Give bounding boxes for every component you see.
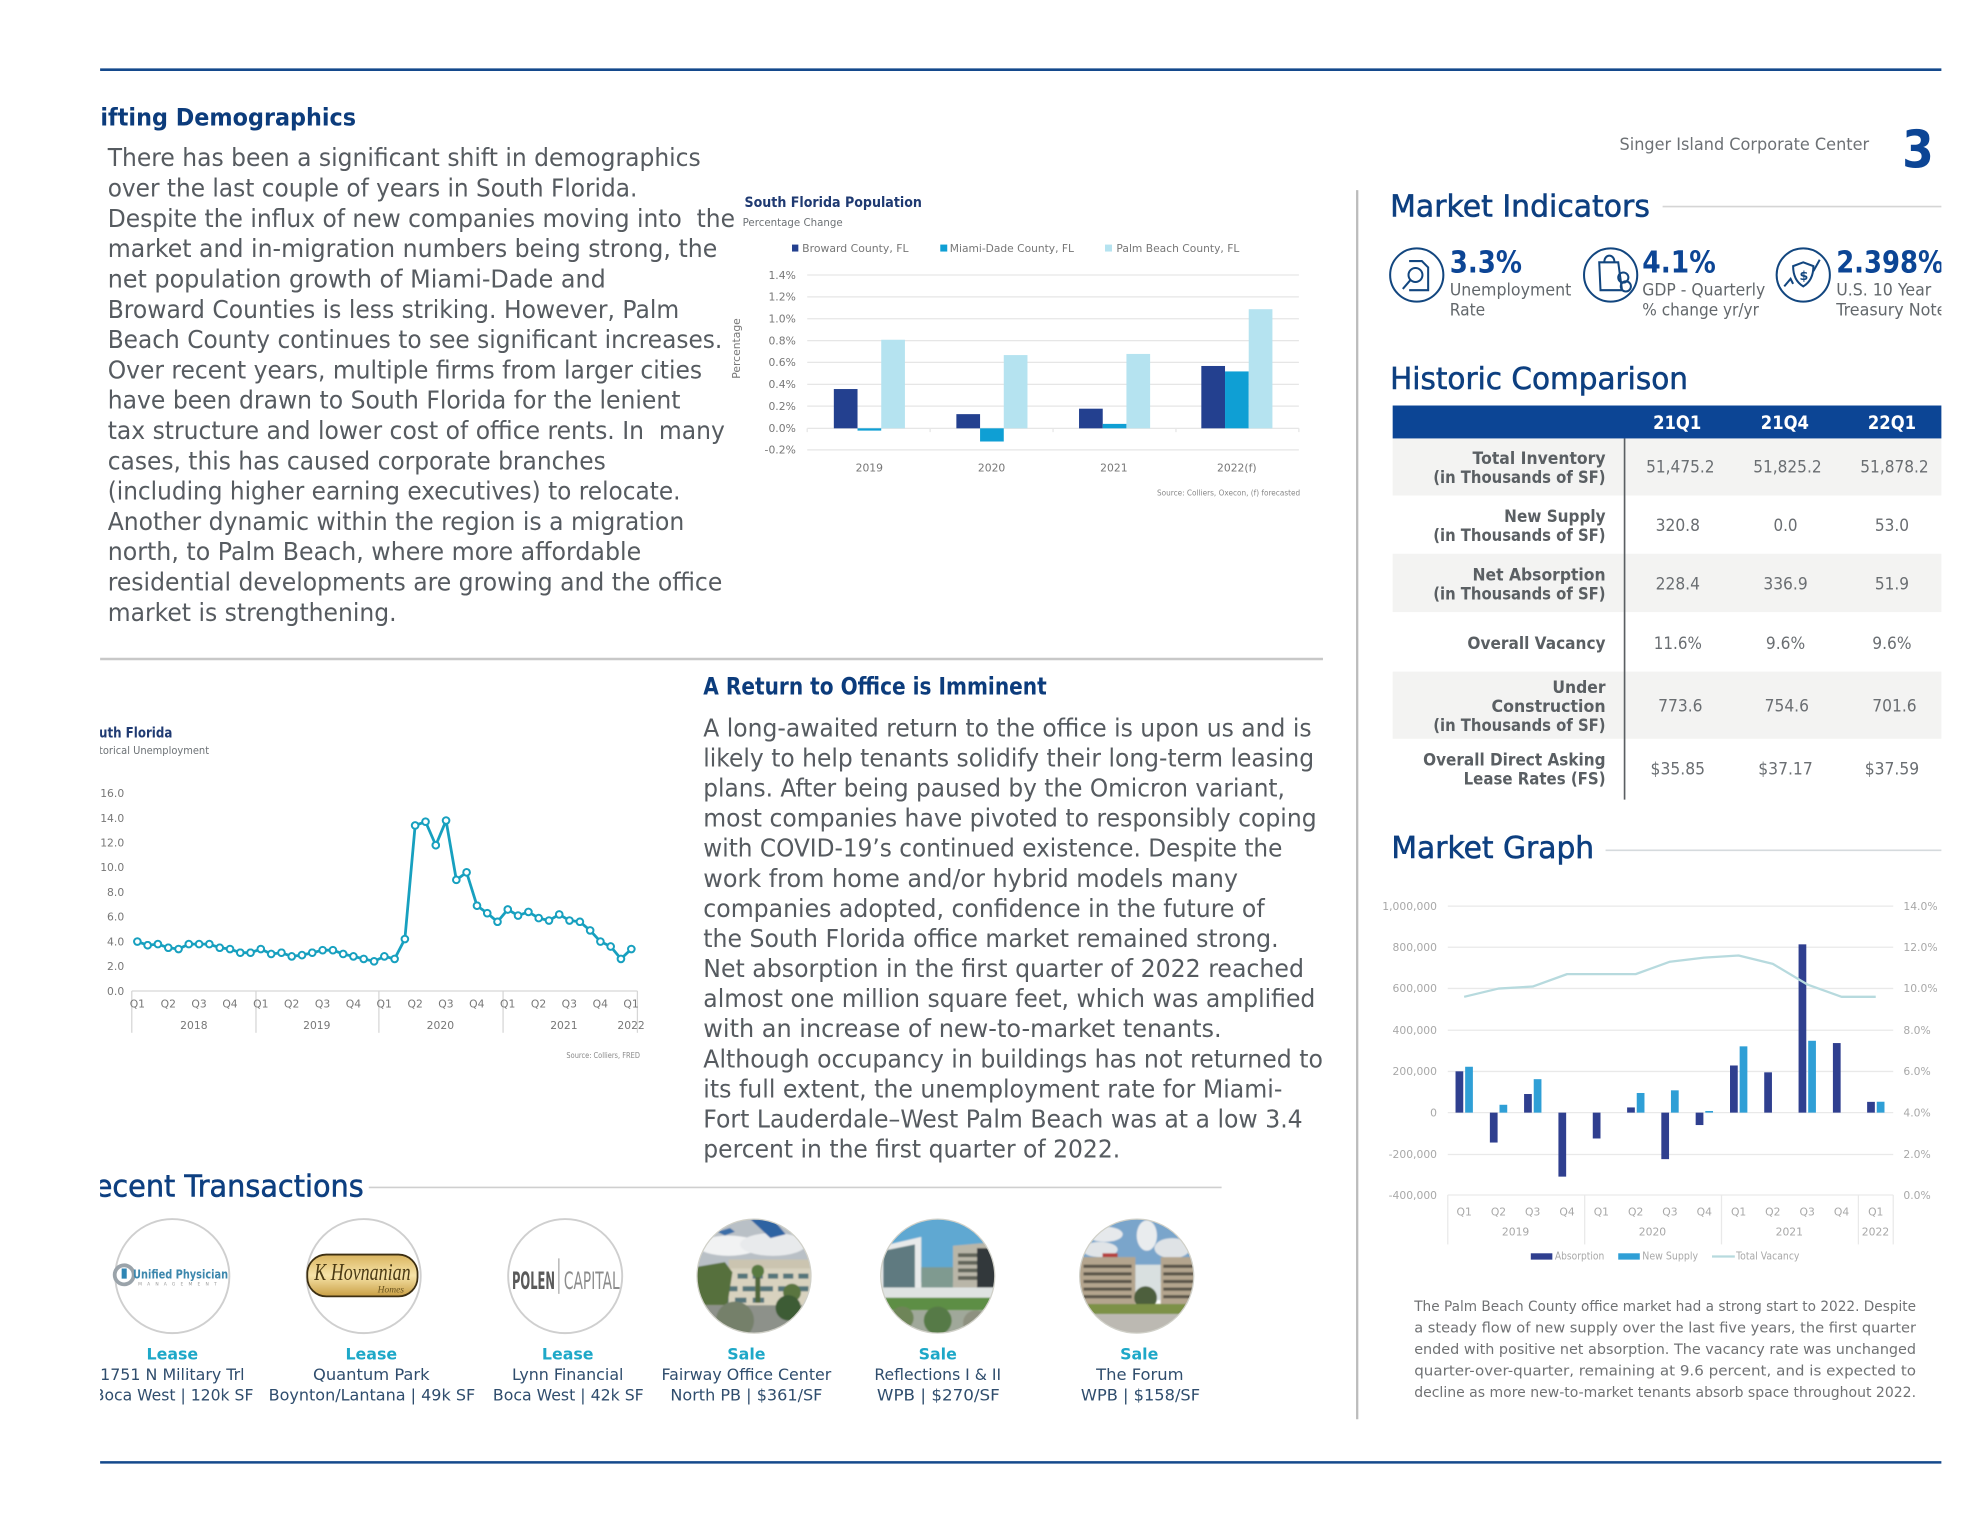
line chart: South Florida Historical Unemployment: 2022 bbox=[617, 1019, 645, 1032]
bar chart: South Florida Population: 0.8% bbox=[768, 334, 796, 347]
line chart: South Florida Historical Unemployment: 2019 bbox=[303, 1019, 331, 1032]
text block: demographics: residential developments are growing and the office bbox=[108, 568, 722, 597]
text block: return to office: Fort Lauderdale–West Palm Beach was at a low 3.4 bbox=[703, 1105, 1303, 1134]
table: historic comparison: $37.59 bbox=[1865, 759, 1919, 779]
table: historic comparison: 51,475.2 bbox=[1646, 458, 1715, 478]
text block: market graph commentary: quarter-over-quarter, remaining at 9.6 percent, and is expected to bbox=[1414, 1363, 1916, 1380]
bar chart: South Florida Population: 0.0% bbox=[768, 422, 796, 435]
text block: demographics: over the last couple of years in South Florida. bbox=[108, 173, 637, 202]
text block: demographics: tax structure and lower cost of office rents. In many bbox=[108, 416, 725, 445]
table: historic comparison: 9.6% bbox=[1872, 634, 1912, 654]
combo chart: absorption, new supply and vacancy: Absorption bbox=[1555, 1250, 1604, 1263]
line chart: South Florida Historical Unemployment: Source: Colliers, FRED bbox=[566, 1051, 640, 1060]
text block: demographics: Beach County continues to see significant increases. bbox=[108, 325, 722, 354]
text block: demographics: net population growth of Miami-Dade and bbox=[108, 265, 606, 294]
bar chart: South Florida Population: Source: Colliers, Oxecon, (f) forecasted bbox=[1157, 488, 1300, 497]
line chart: South Florida Historical Unemployment: Historical Unemployment bbox=[84, 744, 209, 757]
text block: return to office: most companies have pivoted to responsibly coping bbox=[703, 804, 1317, 833]
line chart: South Florida Historical Unemployment: Q3 bbox=[315, 997, 330, 1010]
transaction: Unified Physician lease: Unified Physician bbox=[133, 1268, 228, 1282]
transaction: Polen Capital lease: Lease bbox=[542, 1345, 594, 1364]
combo chart: absorption, new supply and vacancy: 6.0% bbox=[1903, 1065, 1931, 1078]
line chart: South Florida Historical Unemployment: 0.0 bbox=[107, 985, 124, 998]
text block: return to office: A long-awaited return to the office is upon us and is bbox=[703, 713, 1312, 742]
indicator: GDP: 4.1% bbox=[1642, 245, 1716, 280]
transaction: The Forum sale: The Forum bbox=[1095, 1365, 1184, 1384]
text block: return to office: percent in the first quarter of 2022. bbox=[703, 1135, 1120, 1164]
combo chart: absorption, new supply and vacancy: 4.0% bbox=[1903, 1106, 1931, 1119]
indicator: unemployment rate: Rate bbox=[1450, 301, 1485, 321]
text block: demographics: Another dynamic within the region is a migration bbox=[108, 507, 684, 536]
combo chart: absorption, new supply and vacancy: 2019 bbox=[1502, 1226, 1529, 1239]
transaction: K Hovnanian lease: Quantum Park bbox=[313, 1365, 430, 1384]
text block: demographics: (including higher earning executives) to relocate. bbox=[108, 477, 680, 506]
table: historic comparison: 228.4 bbox=[1656, 574, 1700, 594]
transaction: Reflections I and II sale bbox=[874, 1217, 1001, 1404]
combo chart: absorption, new supply and vacancy: Q1 bbox=[1868, 1205, 1883, 1218]
indicator: treasury note bbox=[1777, 245, 1946, 321]
transaction: Reflections I and II sale: Sale bbox=[919, 1345, 957, 1364]
table: historic comparison: $35.85 bbox=[1651, 759, 1705, 779]
transaction: Polen Capital lease: POLEN bbox=[512, 1267, 555, 1295]
combo chart: absorption, new supply and vacancy: Q3 bbox=[1800, 1205, 1815, 1218]
transaction: The Forum sale: Sale bbox=[1120, 1345, 1158, 1364]
table: historic comparison: New Supply bbox=[1504, 507, 1606, 527]
text block: demographics: market and in-migration numbers being strong, the bbox=[108, 234, 717, 263]
indicator: treasury note: U.S. 10 Year bbox=[1836, 280, 1932, 300]
table: historic comparison: 0.0 bbox=[1773, 516, 1798, 536]
heading: Historic Comparison: Historic Comparison bbox=[1390, 362, 1688, 397]
line chart: South Florida Historical Unemployment: Q2 bbox=[284, 997, 299, 1010]
combo chart: absorption, new supply and vacancy: Q1 bbox=[1456, 1205, 1472, 1218]
combo chart: absorption, new supply and vacancy: 10.0% bbox=[1903, 982, 1938, 995]
text block: demographics: cases, this has caused corporate branches bbox=[108, 446, 606, 475]
combo chart: absorption, new supply and vacancy: -400,000 bbox=[1389, 1189, 1437, 1202]
bar chart: South Florida Population: 2020 bbox=[978, 461, 1005, 474]
combo chart: absorption, new supply and vacancy: 12.0% bbox=[1903, 941, 1938, 954]
line chart: South Florida Historical Unemployment: Q3 bbox=[438, 997, 454, 1010]
transaction: Unified Physician lease bbox=[94, 1219, 253, 1404]
text block: return to office: work from home and/or hybrid models many bbox=[703, 864, 1238, 893]
combo chart: absorption, new supply and vacancy: Q2 bbox=[1628, 1205, 1643, 1218]
transaction: Polen Capital lease: CAPITAL bbox=[564, 1267, 620, 1295]
heading: Market Indicators: Market Indicators bbox=[1390, 190, 1650, 225]
line chart: South Florida Historical Unemployment: 10.0 bbox=[100, 861, 124, 874]
transaction: K Hovnanian lease: Homes bbox=[377, 1286, 404, 1296]
text block: return to office: companies adopted, confidence in the future of bbox=[703, 894, 1266, 923]
icon: magnifier on document bbox=[1390, 248, 1443, 302]
table: historic comparison: 21Q4 bbox=[1761, 412, 1809, 434]
combo chart: absorption, new supply and vacancy: 0.0% bbox=[1903, 1189, 1931, 1202]
combo chart: absorption, new supply and vacancy bbox=[1382, 900, 1938, 1263]
combo chart: absorption, new supply and vacancy: 2.0% bbox=[1903, 1148, 1931, 1161]
transaction: Fairway Office Center sale: North PB | $361/SF bbox=[670, 1385, 822, 1404]
combo chart: absorption, new supply and vacancy: 0 bbox=[1430, 1106, 1437, 1119]
transaction: Unified Physician lease: MANAGEMENT bbox=[138, 1282, 217, 1288]
transaction: K Hovnanian lease: K Hovnanian bbox=[314, 1260, 411, 1286]
table: historic comparison: Overall Vacancy bbox=[1467, 634, 1606, 654]
combo chart: absorption, new supply and vacancy: 8.0% bbox=[1903, 1024, 1931, 1037]
text block: demographics: Over recent years, multiple firms from larger cities bbox=[108, 355, 702, 384]
bar chart: South Florida Population: Percentage bbox=[730, 318, 743, 379]
table: historic comparison: Net Absorption bbox=[1473, 565, 1606, 585]
line chart: South Florida Historical Unemployment: 2020 bbox=[427, 1019, 454, 1032]
table: historic comparison: $37.17 bbox=[1758, 759, 1813, 779]
transaction: K Hovnanian lease: Boynton/Lantana | 49k SF bbox=[269, 1385, 475, 1404]
combo chart: absorption, new supply and vacancy: Q1 bbox=[1594, 1205, 1609, 1218]
combo chart: absorption, new supply and vacancy: 400,000 bbox=[1392, 1024, 1437, 1037]
line chart: South Florida Historical Unemployment: 14.0 bbox=[100, 812, 124, 825]
table: historic comparison: Construction bbox=[1492, 697, 1606, 717]
line chart: South Florida Historical Unemployment: Q2 bbox=[407, 997, 423, 1010]
indicator: treasury note: $ bbox=[1799, 268, 1808, 283]
table: historic comparison: 773.6 bbox=[1658, 697, 1703, 717]
combo chart: absorption, new supply and vacancy: Q4 bbox=[1697, 1205, 1712, 1218]
combo chart: absorption, new supply and vacancy: -200,000 bbox=[1389, 1148, 1437, 1161]
text block: demographics: There has been a significant shift in demographics bbox=[107, 143, 701, 172]
line chart: South Florida Historical Unemployment: 2018 bbox=[180, 1019, 208, 1032]
transaction: Polen Capital lease: Boca West | 42k SF bbox=[493, 1385, 644, 1404]
text block: return to office bbox=[703, 713, 1323, 1164]
table: historic comparison: 53.0 bbox=[1875, 516, 1909, 536]
table: historic comparison: Lease Rates (FS) bbox=[1464, 769, 1606, 789]
table: historic comparison bbox=[1393, 406, 1941, 800]
text block: market graph commentary: ended with positive net absorption. The vacancy rate was unchanged bbox=[1414, 1341, 1916, 1358]
text block: demographics bbox=[107, 143, 735, 627]
combo chart: absorption, new supply and vacancy: Q1 bbox=[1731, 1205, 1746, 1218]
line chart: South Florida Historical Unemployment: 2021 bbox=[550, 1019, 578, 1032]
table: historic comparison: 336.9 bbox=[1763, 574, 1808, 594]
line chart: South Florida Historical Unemployment: Q1 bbox=[130, 997, 145, 1010]
bar chart: South Florida Population: 2019 bbox=[856, 461, 883, 474]
line chart: South Florida Historical Unemployment: Q3 bbox=[562, 997, 577, 1010]
indicator: GDP bbox=[1584, 245, 1765, 321]
text block: return to office: plans. After being paused by the Omicron variant, bbox=[703, 773, 1285, 802]
line chart: South Florida Historical Unemployment: Q2 bbox=[531, 997, 546, 1010]
table: historic comparison: (in Thousands of SF) bbox=[1433, 716, 1606, 736]
table: historic comparison: 21Q1 bbox=[1653, 412, 1701, 434]
bar chart: South Florida Population: 0.2% bbox=[768, 400, 796, 413]
combo chart: absorption, new supply and vacancy: 600,000 bbox=[1392, 982, 1437, 995]
transaction: K Hovnanian lease: Lease bbox=[345, 1345, 397, 1364]
transaction: Fairway Office Center sale: Fairway Office Center bbox=[661, 1365, 832, 1384]
text block: return to office: likely to help tenants solidify their long-term leasing bbox=[703, 743, 1314, 772]
table: historic comparison: (in Thousands of SF) bbox=[1433, 584, 1606, 604]
indicator: treasury note: 2.398% bbox=[1836, 245, 1944, 280]
table: historic comparison: 320.8 bbox=[1656, 516, 1700, 536]
transaction: Reflections I and II sale: Reflections I & II bbox=[874, 1365, 1001, 1384]
page header: property name and page number bbox=[1620, 120, 1934, 180]
table: historic comparison: Total Inventory bbox=[1473, 449, 1606, 469]
transaction: Unified Physician lease: Lease bbox=[147, 1345, 198, 1364]
text block: return to office: the South Florida office market remained strong. bbox=[703, 924, 1279, 953]
bar chart: South Florida Population: Broward County, FL bbox=[802, 242, 909, 255]
heading: A Return to Office is Imminent: A Return to Office is Imminent bbox=[703, 672, 1047, 700]
bar chart: South Florida Population: Miami-Dade County, FL bbox=[950, 242, 1074, 255]
combo chart: absorption, new supply and vacancy: 1,000,000 bbox=[1382, 900, 1437, 913]
combo chart: absorption, new supply and vacancy: Total Vacancy bbox=[1735, 1250, 1800, 1263]
text block: market graph commentary bbox=[1413, 1298, 1916, 1401]
indicator: GDP: % change yr/yr bbox=[1642, 301, 1760, 321]
line chart: South Florida Historical Unemployment: Q2 bbox=[161, 997, 176, 1010]
heading: Market Graph: Market Graph bbox=[1391, 831, 1594, 866]
line chart: South Florida Historical Unemployment: South Florida bbox=[82, 726, 172, 742]
line chart: South Florida Historical Unemployment: 2.0 bbox=[107, 960, 124, 973]
combo chart: absorption, new supply and vacancy: 2021 bbox=[1776, 1226, 1803, 1239]
combo chart: absorption, new supply and vacancy: Q2 bbox=[1491, 1205, 1506, 1218]
line chart: South Florida Historical Unemployment: 6.0 bbox=[107, 911, 124, 924]
table: historic comparison: 51,878.2 bbox=[1860, 458, 1929, 478]
table: historic comparison: (in Thousands of SF) bbox=[1433, 468, 1606, 488]
text block: market graph commentary: The Palm Beach County office market had a strong start to 2022. Despite bbox=[1413, 1298, 1916, 1315]
indicator: treasury note: Treasury Note bbox=[1835, 301, 1946, 321]
transaction: The Forum sale bbox=[1077, 1217, 1200, 1404]
icon: shopping bag with coins bbox=[1584, 248, 1637, 302]
line chart: South Florida Historical Unemployment: 8.0 bbox=[107, 886, 124, 899]
line chart: South Florida Historical Unemployment: Q4 bbox=[593, 997, 608, 1010]
table: historic comparison: 22Q1 bbox=[1868, 412, 1916, 434]
line chart: South Florida Historical Unemployment: 16.0 bbox=[100, 787, 124, 800]
combo chart: absorption, new supply and vacancy: 800,000 bbox=[1392, 941, 1437, 954]
transaction: Fairway Office Center sale bbox=[661, 1217, 832, 1404]
text block: return to office: with COVID-19’s continued existence. Despite the bbox=[703, 834, 1282, 863]
indicator: GDP: GDP - Quarterly bbox=[1642, 280, 1765, 300]
table: historic comparison: 754.6 bbox=[1765, 697, 1809, 717]
combo chart: absorption, new supply and vacancy: 14.0% bbox=[1903, 900, 1938, 913]
text block: demographics: market is strengthening. bbox=[108, 598, 397, 627]
text block: return to office: its full extent, the unemployment rate for Miami- bbox=[703, 1074, 1282, 1103]
transaction: K Hovnanian lease bbox=[269, 1219, 475, 1404]
line chart: South Florida Historical Unemployment bbox=[82, 726, 645, 1060]
line chart: South Florida Historical Unemployment: 12.0 bbox=[100, 837, 124, 850]
indicator: unemployment rate: 3.3% bbox=[1450, 245, 1522, 280]
bar chart: South Florida Population: 1.0% bbox=[768, 313, 796, 326]
combo chart: absorption, new supply and vacancy: Q4 bbox=[1559, 1205, 1575, 1218]
bar chart: South Florida Population: Percentage Change bbox=[743, 216, 843, 229]
text block: demographics: Broward Counties is less striking. However, Palm bbox=[108, 295, 679, 324]
line chart: South Florida Historical Unemployment: Q4 bbox=[469, 997, 485, 1010]
text block: market graph commentary: a steady flow of new supply over the last five years, the first quarter bbox=[1414, 1319, 1916, 1336]
line chart: South Florida Historical Unemployment: Q1 bbox=[623, 997, 639, 1010]
line chart: South Florida Historical Unemployment: Q4 bbox=[346, 997, 361, 1010]
bar chart: South Florida Population: Palm Beach County, FL bbox=[1116, 242, 1239, 255]
text block: demographics: have been drawn to South Florida for the lenient bbox=[108, 386, 681, 415]
icon: shield with dollar and trend bbox=[1777, 248, 1830, 302]
bar chart: South Florida Population: -0.2% bbox=[765, 444, 796, 457]
combo chart: absorption, new supply and vacancy: Q2 bbox=[1765, 1205, 1781, 1218]
bar chart: South Florida Population: 0.6% bbox=[768, 356, 796, 369]
indicator: unemployment rate bbox=[1390, 245, 1572, 321]
text block: return to office: Net absorption in the first quarter of 2022 reached bbox=[703, 954, 1304, 983]
line chart: South Florida Historical Unemployment: Q3 bbox=[191, 997, 207, 1010]
heading: Shifting Demographics: Shifting Demographics bbox=[68, 103, 356, 131]
line chart: South Florida Historical Unemployment: 4.0 bbox=[107, 935, 124, 948]
heading: Recent Transactions: Recent Transactions bbox=[76, 1169, 364, 1204]
text block: demographics: Despite the influx of new companies moving into the bbox=[108, 204, 735, 233]
table: historic comparison: Under bbox=[1552, 678, 1606, 698]
text block: return to office: almost one million square feet, which was amplified bbox=[703, 984, 1315, 1013]
line chart: South Florida Historical Unemployment: Q1 bbox=[253, 997, 268, 1010]
bar chart: South Florida Population bbox=[730, 195, 1300, 497]
combo chart: absorption, new supply and vacancy: Q4 bbox=[1834, 1205, 1849, 1218]
line chart: South Florida Historical Unemployment: Q4 bbox=[222, 997, 238, 1010]
table: historic comparison: (in Thousands of SF) bbox=[1433, 526, 1606, 546]
table: historic comparison: 11.6% bbox=[1654, 634, 1702, 654]
table: historic comparison: 701.6 bbox=[1872, 697, 1917, 717]
transaction: Fairway Office Center sale: Sale bbox=[727, 1345, 766, 1364]
line chart: South Florida Historical Unemployment: Q1 bbox=[377, 997, 392, 1010]
transaction: Polen Capital lease: Lynn Financial bbox=[512, 1365, 623, 1384]
transaction: The Forum sale: WPB | $158/SF bbox=[1081, 1385, 1200, 1404]
text block: return to office: with an increase of new-to-market tenants. bbox=[703, 1014, 1222, 1043]
indicator: unemployment rate: Unemployment bbox=[1450, 280, 1572, 300]
combo chart: absorption, new supply and vacancy: Q3 bbox=[1662, 1205, 1678, 1218]
transaction: Unified Physician lease: 1751 N Military Trl bbox=[100, 1365, 245, 1384]
text block: return to office: Although occupancy in buildings has not returned to bbox=[703, 1044, 1323, 1073]
bar chart: South Florida Population: 2022(f) bbox=[1217, 461, 1257, 474]
table: historic comparison: Overall Direct Asking bbox=[1423, 750, 1606, 770]
combo chart: absorption, new supply and vacancy: 2020 bbox=[1639, 1226, 1666, 1239]
bar chart: South Florida Population: 1.2% bbox=[768, 291, 796, 304]
combo chart: absorption, new supply and vacancy: 200,000 bbox=[1392, 1065, 1437, 1078]
page header: property name and page number: 3 bbox=[1902, 120, 1934, 180]
combo chart: absorption, new supply and vacancy: Q3 bbox=[1525, 1205, 1540, 1218]
text block: market graph commentary: decline as more new-to-market tenants absorb space throughout 2022. bbox=[1414, 1384, 1916, 1401]
bar chart: South Florida Population: 0.4% bbox=[768, 378, 796, 391]
bar chart: South Florida Population: 2021 bbox=[1100, 461, 1128, 474]
page header: property name and page number: Singer Island Corporate Center bbox=[1620, 135, 1870, 155]
transaction: Reflections I and II sale: WPB | $270/SF bbox=[877, 1385, 1000, 1404]
transaction: Unified Physician lease: Boca West | 120k SF bbox=[94, 1385, 253, 1404]
table: historic comparison: 9.6% bbox=[1766, 634, 1805, 654]
line chart: South Florida Historical Unemployment: Q1 bbox=[500, 997, 515, 1010]
transaction: Polen Capital lease bbox=[493, 1219, 644, 1404]
combo chart: absorption, new supply and vacancy: 2022 bbox=[1862, 1226, 1889, 1239]
bar chart: South Florida Population: 1.4% bbox=[768, 269, 796, 282]
table: historic comparison: 51,825.2 bbox=[1753, 458, 1822, 478]
table: historic comparison: 51.9 bbox=[1875, 574, 1909, 594]
text block: demographics: north, to Palm Beach, where more affordable bbox=[108, 537, 641, 566]
combo chart: absorption, new supply and vacancy: New Supply bbox=[1642, 1250, 1699, 1263]
bar chart: South Florida Population: South Florida Population bbox=[744, 195, 922, 211]
